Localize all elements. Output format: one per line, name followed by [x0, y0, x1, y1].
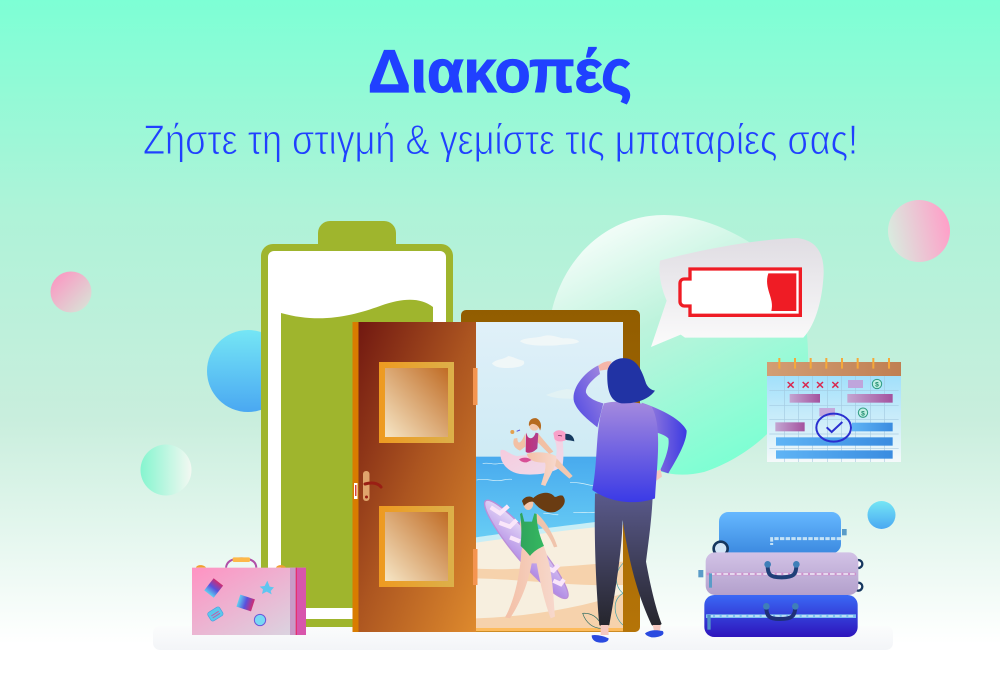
icon: full green battery	[261, 221, 453, 627]
sand	[476, 518, 623, 628]
door window top	[379, 362, 454, 443]
decorative circle: blue right	[868, 501, 896, 529]
palm leaf	[583, 563, 623, 628]
feet	[592, 625, 663, 643]
hair	[607, 358, 655, 403]
dark blue suitcase	[704, 595, 858, 637]
decorative circle: blue left	[207, 330, 289, 412]
dollar coins	[858, 379, 882, 417]
woman seen from behind	[574, 358, 687, 643]
icon: low red battery	[680, 269, 800, 315]
surfer	[505, 493, 565, 618]
decorative circle: pink left	[50, 272, 92, 312]
beach scene	[476, 335, 623, 631]
speech bubble with low battery	[651, 238, 824, 347]
calendar	[767, 358, 901, 462]
lilac suitcase	[698, 552, 862, 595]
subtitle: Ζήστε τη στιγμή & γεμίστε τις μπαταρίες σας!	[143, 116, 858, 163]
blue suitcase	[714, 512, 847, 556]
door frame	[461, 310, 640, 632]
decorative circle: mint	[140, 444, 192, 496]
calendar rings	[779, 358, 889, 369]
decorative circle: pink right	[888, 200, 950, 262]
calendar header	[767, 362, 901, 376]
surfboard	[476, 493, 576, 606]
title: Διακοπές	[368, 38, 632, 105]
background blob	[552, 215, 808, 475]
check mark circle	[816, 414, 851, 442]
sea	[476, 457, 623, 540]
scheduled bars	[775, 380, 893, 459]
swimmer on flamingo float	[500, 418, 574, 486]
dollar coins: $	[861, 410, 865, 417]
waves	[477, 463, 597, 515]
legs	[595, 493, 662, 627]
stickers	[204, 578, 274, 626]
torso	[592, 402, 658, 502]
dollar coins: $	[875, 382, 879, 389]
cross marks	[788, 382, 838, 388]
floor shadow	[153, 626, 893, 650]
far arm	[642, 403, 687, 473]
door window bottom	[379, 506, 454, 587]
stacked suitcases	[698, 512, 862, 637]
door hinges	[473, 368, 478, 585]
raised arm	[574, 365, 603, 427]
pink suitcase with stickers	[192, 557, 306, 635]
door leaf	[352, 322, 478, 632]
clouds	[520, 335, 579, 346]
door handle	[354, 471, 381, 501]
